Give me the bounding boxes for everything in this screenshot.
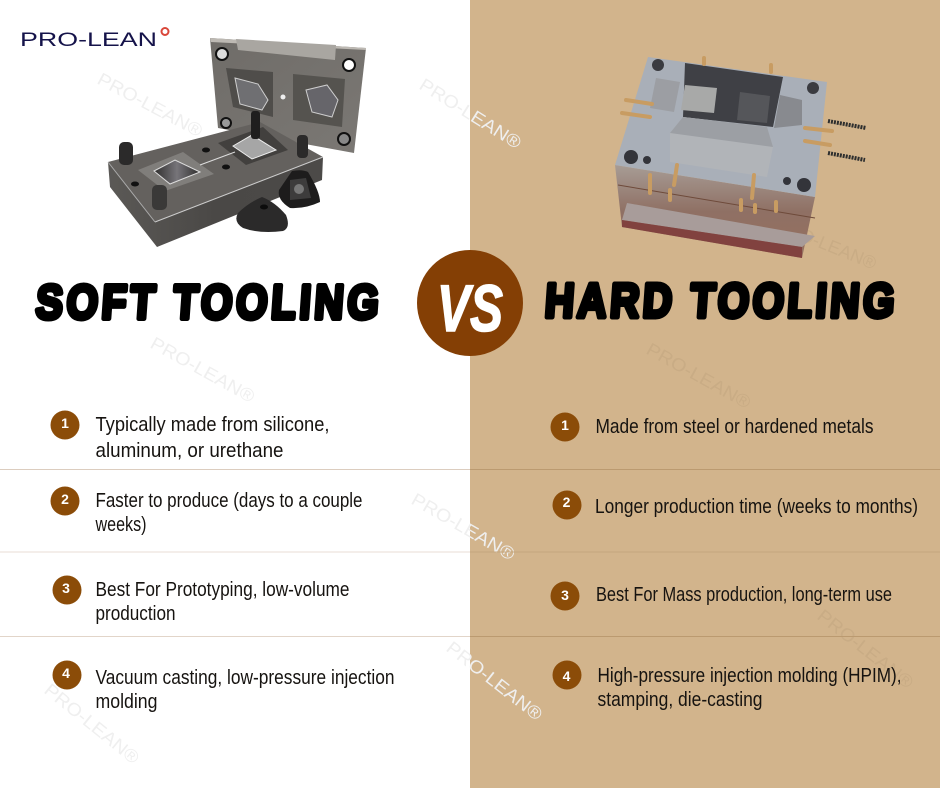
watermarks: PRO-LEAN® [416,74,525,153]
watermarks: PRO-LEAN® [147,333,258,407]
item 1: 1 [561,417,569,433]
item 4: 4 [563,668,571,684]
mold lower body [615,165,815,258]
logo: PRO-LEAN [20,28,168,51]
item 3: 3 [62,580,70,596]
item 1: Made from steel or hardened metals [596,416,874,438]
watermarks: PRO-LEAN® [40,680,143,768]
mold base plate [108,111,323,247]
mold back plate [210,38,366,153]
item 4 [52,660,394,713]
title: soft tooling: SOFT TOOLING [34,276,381,329]
item 2: Faster to produce (days to a couple [96,490,362,512]
logo: PRO-LEAN: PRO-LEAN [20,30,157,51]
item 4: 4 [62,665,70,681]
item 2: 2 [563,494,571,510]
soft tooling list [50,410,394,713]
hard tooling list [550,412,918,711]
title: hard tooling: HARD TOOLING [543,275,896,328]
item 1: 1 [61,415,69,431]
item 1 [50,410,330,462]
item 2 [50,486,362,536]
image: hard tooling mold [615,57,866,258]
item 3: production [96,603,176,625]
vs badge [417,250,523,356]
item 1: Typically made from silicone, [96,414,330,436]
item 2 [552,490,918,520]
item 4: molding [96,691,158,713]
watermarks: PRO-LEAN® [443,637,546,725]
watermarks: PRO-LEAN® [643,339,754,413]
item 1: aluminum, or urethane [96,440,284,462]
item 4: Vacuum casting, low-pressure injection [96,667,394,689]
item 3: 3 [561,587,569,603]
row dividers [0,470,940,636]
mold top face [615,57,827,197]
panel: hard tooling background [470,0,940,788]
item 4: stamping, die-casting [598,689,762,711]
item 3: Best For Prototyping, low-volume [96,579,350,601]
item 2: weeks) [95,514,146,536]
vs badge: VS [437,271,503,345]
watermarks: PRO-LEAN® [94,69,206,141]
item 3 [550,582,892,610]
item 1 [550,412,874,442]
white left background [0,0,470,788]
molded part: dark ribbed [279,170,320,208]
item 2: 2 [61,491,69,507]
item 3 [52,576,350,625]
watermarks: PRO-LEAN® [814,605,917,693]
item 4 [552,660,902,711]
brass fittings and threaded rods [622,58,866,212]
image: soft tooling mold [108,38,366,247]
molded part: dark cap [236,197,288,232]
watermarks: PRO-LEAN® [408,489,518,564]
watermarks: PRO-LEAN® [774,215,879,273]
